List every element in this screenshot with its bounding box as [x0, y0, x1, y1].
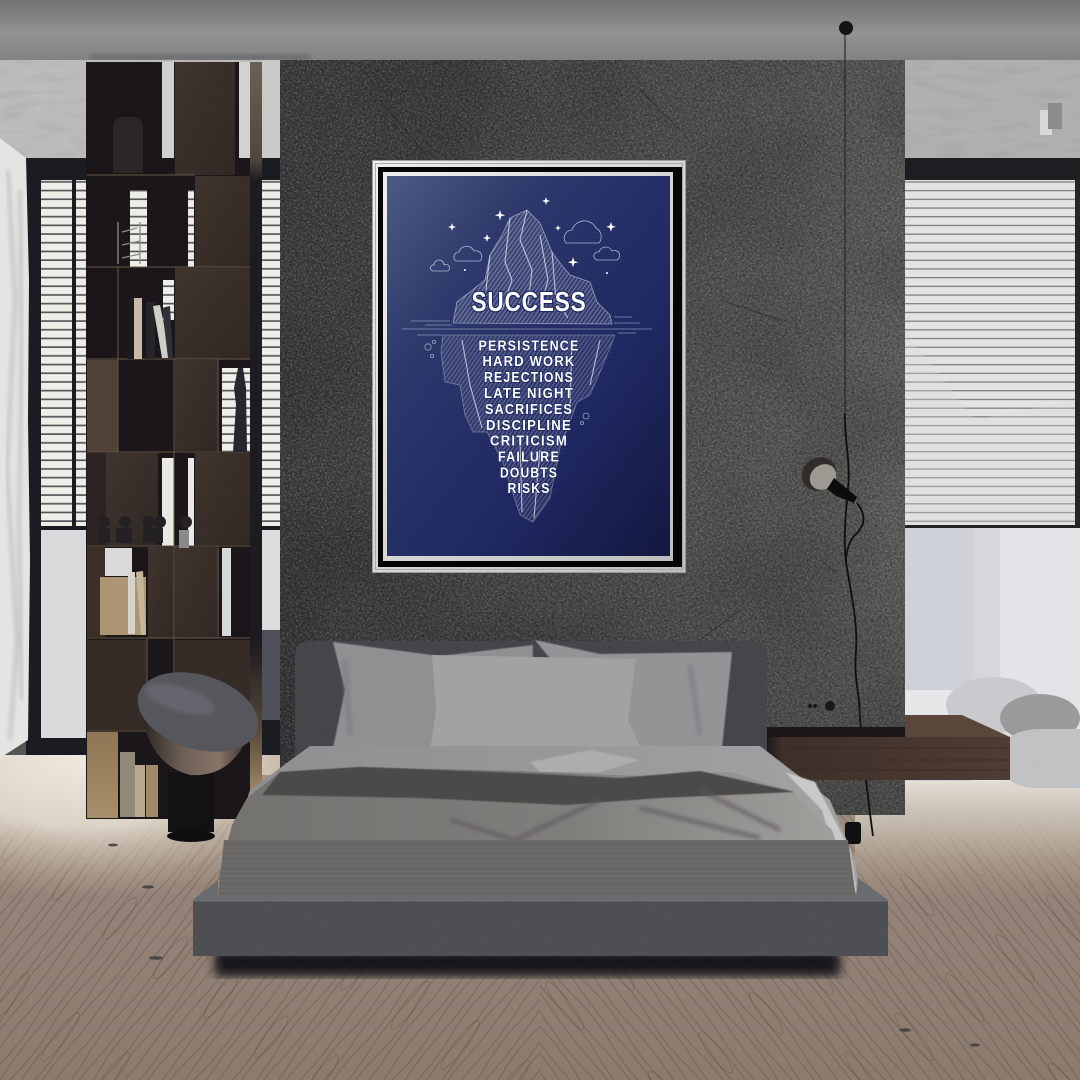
bookshelf	[86, 62, 262, 819]
floor knots	[108, 844, 980, 1047]
chair	[128, 658, 268, 842]
floor highlight: right	[855, 781, 1080, 901]
poster word list: REJECTIONS	[484, 369, 574, 386]
poster word list: RISKS	[508, 480, 550, 497]
bed base	[193, 878, 888, 956]
ceiling spotlight	[1040, 103, 1062, 135]
mattress side	[218, 840, 856, 898]
floor	[0, 755, 1080, 1080]
back pillows	[333, 640, 732, 748]
shelf edges	[87, 175, 250, 731]
wall canvas frame	[372, 160, 686, 573]
iceberg ridges	[462, 210, 600, 518]
iceberg above water	[453, 210, 612, 324]
iceberg below water	[441, 335, 615, 522]
floor patch at the wall foot	[262, 775, 322, 823]
poster background	[387, 176, 670, 556]
poster word list: SACRIFICES	[485, 401, 573, 418]
brown panels	[87, 62, 250, 818]
floor shadow	[215, 950, 840, 976]
front pillow	[430, 655, 642, 751]
poster word list: DOUBTS	[500, 464, 558, 482]
nightstand	[767, 715, 1010, 780]
poster word list: HARD WORK	[482, 353, 576, 370]
bubbles	[425, 340, 589, 425]
clouds	[430, 221, 620, 271]
wall socket	[808, 701, 835, 711]
books and objects on shelves	[98, 117, 247, 817]
sheet	[220, 746, 858, 885]
wood grain right	[540, 755, 1080, 1080]
left window with blinds and curtain	[0, 60, 290, 758]
headboard	[295, 641, 767, 775]
waterline	[402, 317, 652, 335]
shelf windows	[105, 62, 250, 636]
floor lamp	[795, 21, 873, 844]
stars	[448, 197, 616, 274]
concrete wall	[280, 60, 905, 815]
right window with blinds	[905, 60, 1080, 781]
right shelf post	[250, 62, 262, 807]
blanket	[218, 767, 850, 880]
poster word list: PERSISTENCE	[478, 338, 580, 354]
poster word list: FAILURE	[498, 448, 560, 466]
poster word list: CRITICISM	[490, 432, 568, 450]
white curtain	[0, 138, 30, 758]
iceberg illustration	[402, 197, 652, 522]
lamp head	[795, 450, 857, 503]
wood grain left	[0, 755, 540, 1080]
pouf seats	[946, 677, 1080, 788]
ceiling	[0, 0, 1080, 60]
poster word list: LATE NIGHT	[484, 385, 574, 402]
poster title: SUCCESS	[472, 286, 586, 317]
poster word list	[478, 338, 580, 497]
poster word list: DISCIPLINE	[486, 417, 572, 434]
floor highlight: left	[0, 755, 320, 905]
bed	[193, 640, 888, 976]
